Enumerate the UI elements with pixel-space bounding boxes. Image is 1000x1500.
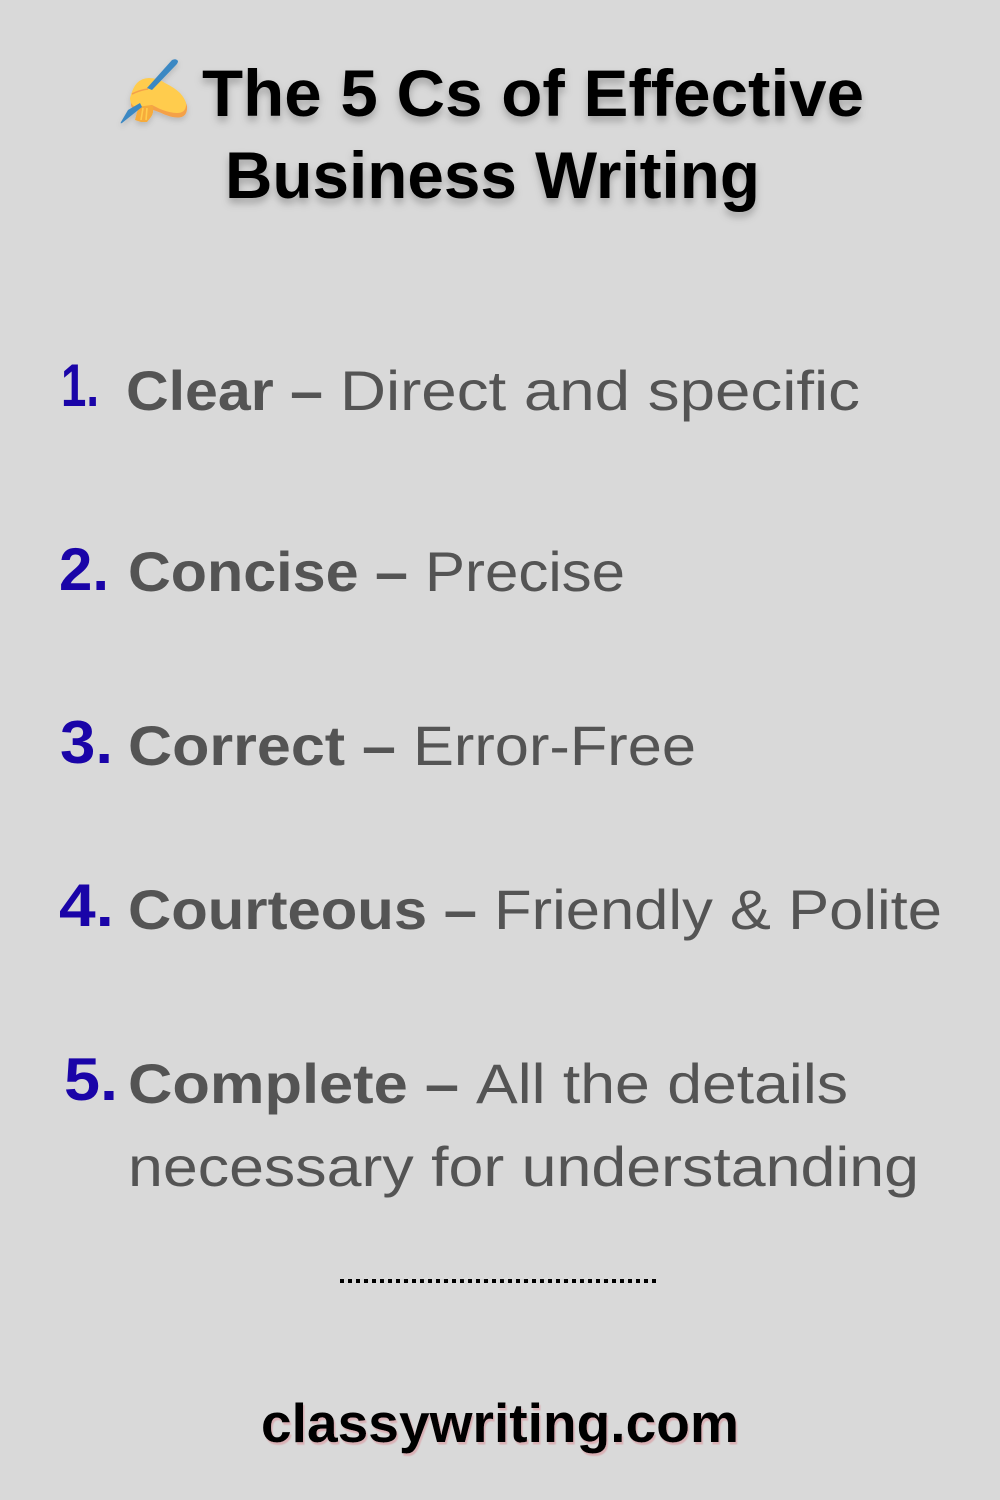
item 3: Correct [60, 709, 696, 777]
number 3: 3. [60, 709, 113, 776]
description: Friendly & Polite: Friendly & Polite [494, 878, 942, 941]
title: The 5 Cs of Effective [202, 56, 864, 130]
label: Courteous: Courteous – [128, 878, 477, 941]
label: Clear: Clear – [126, 359, 323, 422]
label: Correct: Correct – [128, 714, 396, 777]
item 2: Concise [59, 536, 625, 603]
description: Direct and specific: Direct and specific [340, 359, 860, 422]
description: Error-Free: Error-Free [413, 714, 696, 777]
title [202, 56, 864, 212]
label: Complete: Complete – [128, 1052, 459, 1115]
icon: writing hand emoji [121, 59, 187, 123]
number 2: 2. [59, 536, 109, 603]
number 1: 1. [61, 352, 99, 419]
number 4: 4. [59, 872, 114, 939]
description: All the details necessary for understanding [128, 1052, 919, 1198]
item 1: Clear [61, 352, 860, 422]
item 5: Complete [64, 1046, 919, 1198]
item 4: Courteous [59, 872, 942, 941]
description: All the details necessary for understanding: necessary for understanding [128, 1135, 919, 1198]
title: Business Writing [225, 138, 760, 212]
number 5: 5. [64, 1046, 118, 1113]
label: Concise: Concise – [128, 540, 408, 603]
description: Precise: Precise [425, 540, 625, 603]
footer: website: classywriting.com [261, 1392, 739, 1454]
description: All the details necessary for understanding: All the details [476, 1052, 848, 1115]
